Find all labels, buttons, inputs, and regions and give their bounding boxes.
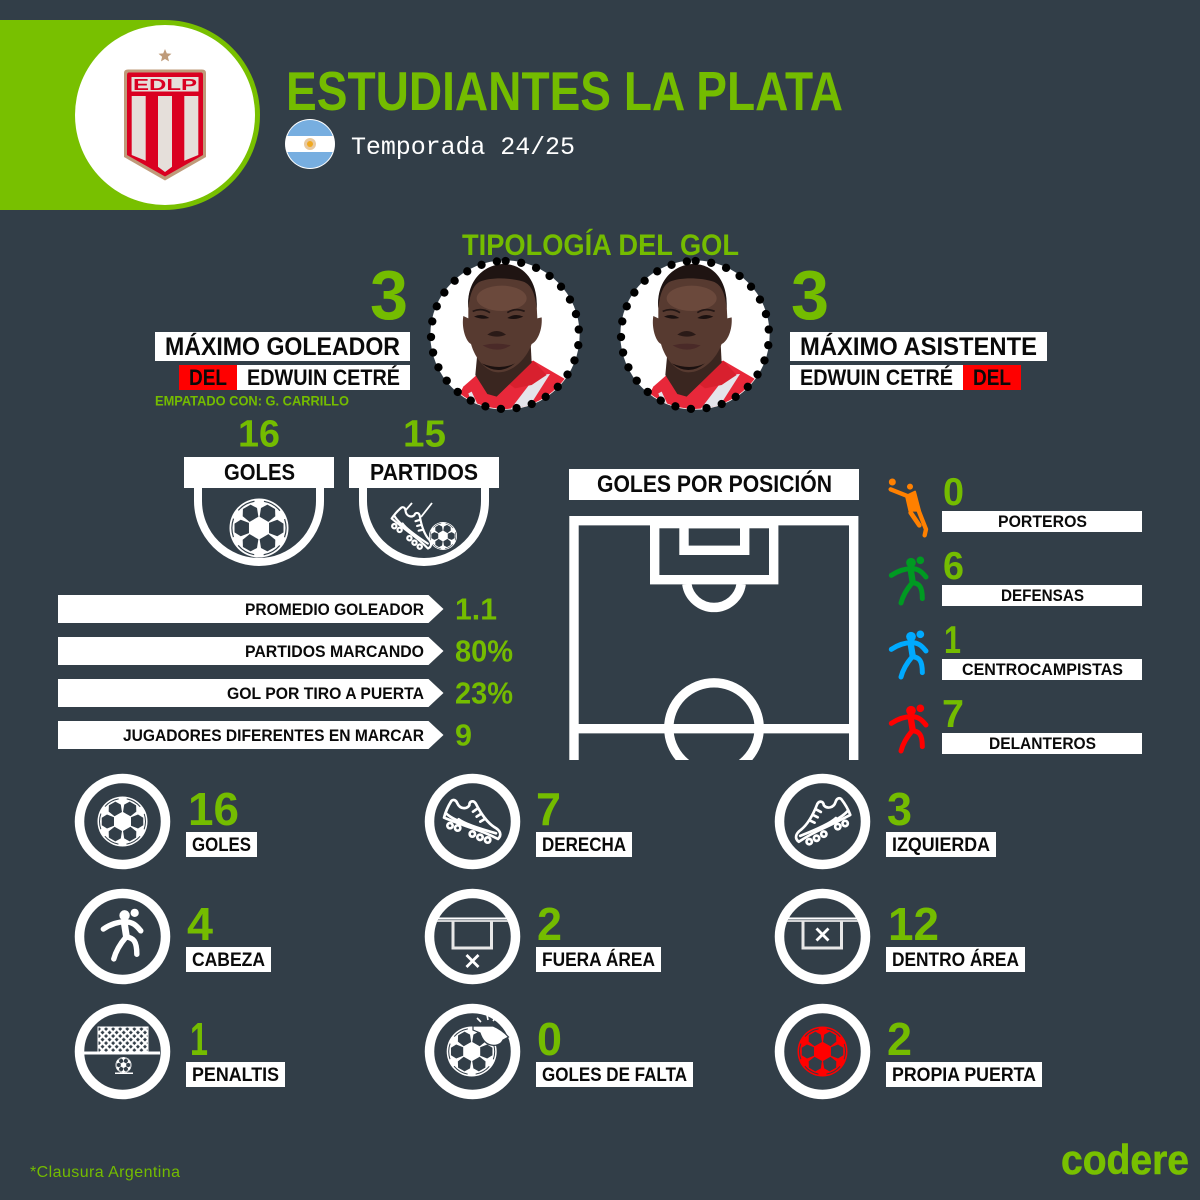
- top scorer value: 3: [370, 256, 408, 334]
- metric: penaltis: PENALTIS: [192, 1065, 279, 1086]
- metric: goles de falta: GOLES DE FALTA: [542, 1065, 687, 1086]
- top assister name: EDWUIN CETRÉ: [800, 365, 953, 390]
- metric: goles de falta: 0: [537, 1013, 562, 1065]
- metric: derecha: DERECHA: [542, 835, 626, 856]
- top scorer name: [179, 365, 410, 390]
- stat: gol por tiro a puerta: [58, 676, 513, 710]
- position: centrocampistas: CENTROCAMPISTAS: [962, 660, 1123, 679]
- icon: football: [98, 796, 148, 846]
- icon: header player: [103, 909, 141, 959]
- stat: promedio goleador: 1.1: [455, 592, 497, 626]
- panel: goals badge: 16: [238, 414, 280, 456]
- icon: goalkeeper: [889, 478, 926, 535]
- stat: jugadores diferentes: [58, 718, 472, 752]
- metric: fuera área: 2: [537, 898, 562, 950]
- top scorer name: EDWUIN CETRÉ: [247, 365, 400, 390]
- metric: dentro área: DENTRO ÁREA: [892, 949, 1019, 971]
- panel: goals badge: GOLES: [224, 459, 295, 485]
- metric: izquierda: 3: [887, 783, 912, 835]
- footnote: *Clausura Argentina: [30, 1164, 180, 1181]
- panel: matches badge: 15: [403, 414, 446, 456]
- position: delanteros: 7: [942, 693, 964, 736]
- tied note: EMPATADO CON: G. CARRILLO: [155, 392, 349, 408]
- position: porteros: PORTEROS: [998, 512, 1087, 531]
- season text: Temporada 24/25: [351, 133, 575, 162]
- chart: football pitch: [574, 521, 854, 773]
- icon: club crest EDLP: EDLP: [133, 77, 197, 94]
- stat: jugadores diferentes: JUGADORES DIFERENTES EN MARCAR: [123, 726, 424, 745]
- panel: matches badge: PARTIDOS: [370, 459, 478, 485]
- position: porteros: [889, 471, 1142, 535]
- portrait: top assister: [620, 260, 770, 413]
- stat: partidos marcando: PARTIDOS MARCANDO: [245, 642, 424, 661]
- heading: goles por posición: GOLES POR POSICIÓN: [597, 470, 832, 498]
- icon: left boot: [792, 797, 853, 846]
- title: ESTUDIANTES LA PLATA: [286, 60, 843, 122]
- position: defensas: [891, 545, 1142, 606]
- metric: cabeza: CABEZA: [192, 950, 265, 971]
- portrait: top scorer: [430, 260, 580, 413]
- panel: goals badge: [184, 414, 334, 562]
- metric: propia puerta: [780, 1008, 1042, 1094]
- metric: propia puerta: PROPIA PUERTA: [892, 1065, 1036, 1086]
- icon: boot kicking ball: [385, 503, 457, 552]
- icon: ball and whistle: [447, 1015, 508, 1076]
- top scorer heading: MÁXIMO GOLEADOR: [165, 332, 400, 361]
- position: defensas: 6: [943, 545, 964, 588]
- metric: derecha: [430, 778, 632, 864]
- top assister name: DEL: [973, 365, 1011, 390]
- metric: cabeza: 4: [187, 898, 213, 950]
- position: porteros: 0: [943, 471, 964, 514]
- metric: dentro área: [780, 894, 1025, 980]
- header: green banner with club crest: [0, 20, 260, 210]
- icon: right boot: [444, 800, 500, 843]
- icon: forward: [891, 704, 926, 751]
- icon: goal and penalty spot: [84, 1027, 160, 1074]
- icon: red football: [798, 1026, 848, 1076]
- position: delanteros: [891, 693, 1142, 754]
- icon: star: [158, 49, 172, 61]
- icon: club crest EDLP: [124, 70, 206, 180]
- top assister block: [790, 256, 1047, 390]
- stat: promedio goleador: PROMEDIO GOLEADOR: [245, 600, 424, 619]
- stat: partidos marcando: [58, 634, 513, 668]
- position: centrocampistas: 1: [944, 619, 961, 662]
- position: defensas: DEFENSAS: [1001, 586, 1084, 605]
- icon: midfielder: [891, 630, 926, 677]
- metric: izquierda: [780, 778, 996, 864]
- metric: penaltis: [80, 1008, 285, 1094]
- icon: outside box: [437, 918, 508, 967]
- logo: codere: codere: [1061, 1136, 1189, 1183]
- metric: fuera área: [430, 894, 661, 980]
- metric: propia puerta: 2: [887, 1013, 912, 1065]
- metric: goles: GOLES: [192, 835, 251, 856]
- stat: partidos marcando: 80%: [455, 634, 513, 668]
- top assister heading: MÁXIMO ASISTENTE: [800, 332, 1037, 361]
- stats list: [58, 592, 513, 752]
- metric: goles: [80, 778, 257, 864]
- metric: goles de falta: [430, 1008, 693, 1094]
- metric: goles: 16: [188, 783, 239, 835]
- metric: penaltis: 1: [190, 1013, 208, 1065]
- icon: inside box: [787, 918, 858, 948]
- top scorer block: [155, 256, 410, 408]
- stat: promedio goleador: [58, 592, 497, 626]
- icon: football: [230, 498, 288, 558]
- stat: jugadores diferentes: 9: [455, 718, 472, 752]
- panel: matches badge: [349, 414, 499, 562]
- heading: tipología del gol: TIPOLOGÍA DEL GOL: [462, 228, 739, 262]
- metric: cabeza: [80, 894, 271, 980]
- stat: gol por tiro a puerta: 23%: [455, 676, 513, 710]
- icon: defender: [891, 556, 926, 603]
- top scorer name: DEL: [189, 365, 227, 390]
- top assister value: 3: [791, 256, 829, 334]
- metric: izquierda: IZQUIERDA: [892, 835, 990, 856]
- position: delanteros: DELANTEROS: [989, 734, 1096, 753]
- metric: fuera área: FUERA ÁREA: [542, 949, 655, 971]
- position: centrocampistas: [891, 619, 1142, 680]
- icon: Argentine flag: [285, 119, 335, 169]
- metric: dentro área: 12: [888, 898, 939, 950]
- metric: derecha: 7: [536, 783, 561, 835]
- stat: gol por tiro a puerta: GOL POR TIRO A PUERTA: [227, 684, 424, 703]
